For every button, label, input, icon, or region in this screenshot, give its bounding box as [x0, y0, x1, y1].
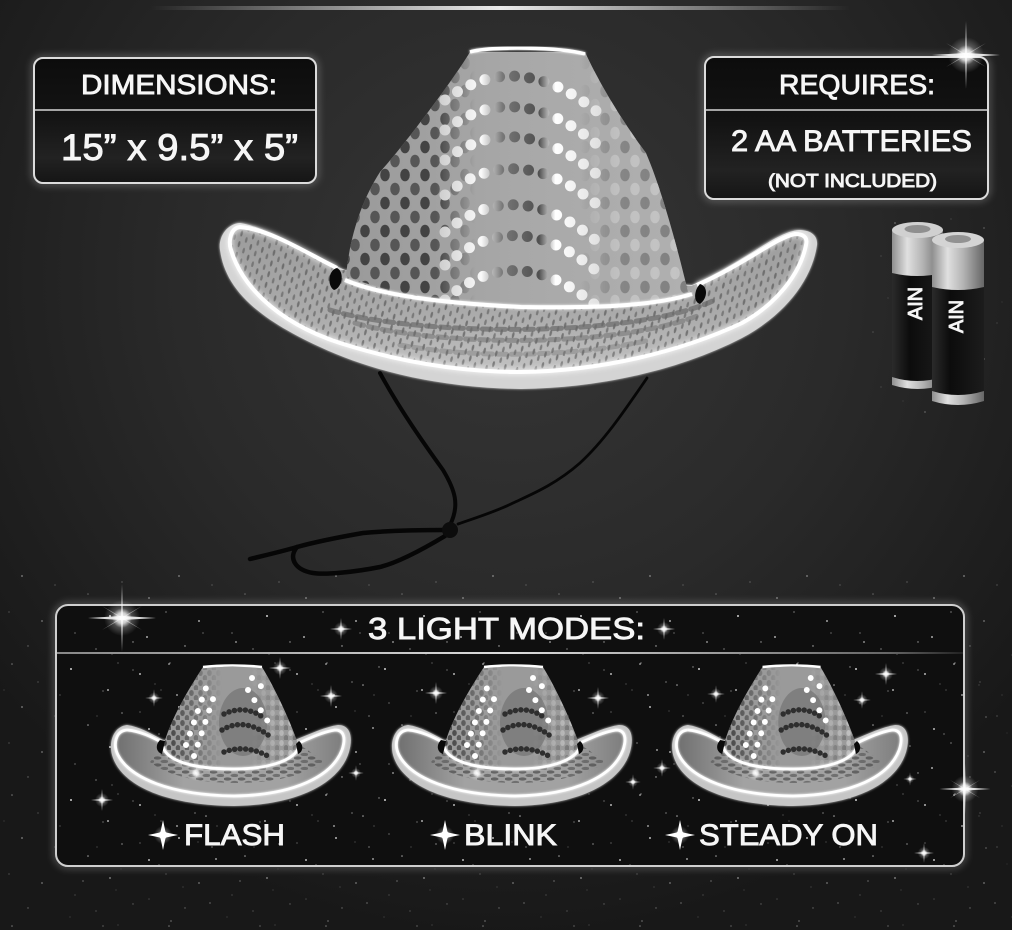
hat brim sequins	[230, 229, 806, 372]
panel: dimensions	[34, 58, 316, 183]
back battery	[892, 222, 943, 389]
hat brim underside rim	[220, 223, 817, 389]
band clip left	[329, 268, 342, 290]
mode: flash hat	[111, 666, 351, 806]
not included note: (NOT INCLUDED)	[768, 171, 937, 191]
mode label: blink	[430, 819, 557, 852]
main hat chin cord	[250, 373, 647, 574]
batteries text: 2 AA BATTERIES	[731, 125, 972, 158]
icon: sparkle top right	[932, 21, 1000, 89]
icon: heading sparkle left	[330, 618, 352, 640]
hat brim surface	[230, 229, 806, 372]
heading: 3 light modes: 3 LIGHT MODES:	[368, 611, 645, 646]
front battery	[932, 232, 984, 405]
mode: steady on hat	[672, 666, 908, 806]
hat crown	[346, 52, 688, 309]
icon: sparkle on panel right edge	[940, 764, 990, 814]
scattered sparkles	[91, 657, 934, 863]
mode label: blink: BLINK	[464, 819, 557, 852]
panel: light modes	[56, 605, 1001, 887]
main hat	[220, 40, 817, 389]
band clip right	[695, 284, 706, 304]
icon: sparkle on light modes panel	[88, 584, 156, 652]
icon: AA batteries	[892, 222, 984, 405]
panel: battery requirement	[705, 57, 988, 199]
neon wire: band	[345, 280, 692, 307]
mode label: flash: FLASH	[184, 819, 285, 852]
brim front sequin rows	[330, 300, 715, 354]
heading: requires: REQUIRES:	[779, 69, 935, 100]
icon: heading sparkle right	[653, 618, 675, 640]
mode: blink hat	[392, 666, 632, 806]
mode label: steady on: STEADY ON	[699, 819, 878, 852]
back battery: AIN	[905, 287, 927, 320]
crown sequins	[348, 58, 688, 305]
dimensions value: 15” x 9.5” x 5”	[61, 127, 298, 168]
neon wire: brim	[230, 227, 806, 372]
front battery: AIN	[946, 300, 968, 333]
neon wire: crown top	[470, 48, 585, 54]
heading: dimensions: DIMENSIONS:	[81, 69, 277, 100]
